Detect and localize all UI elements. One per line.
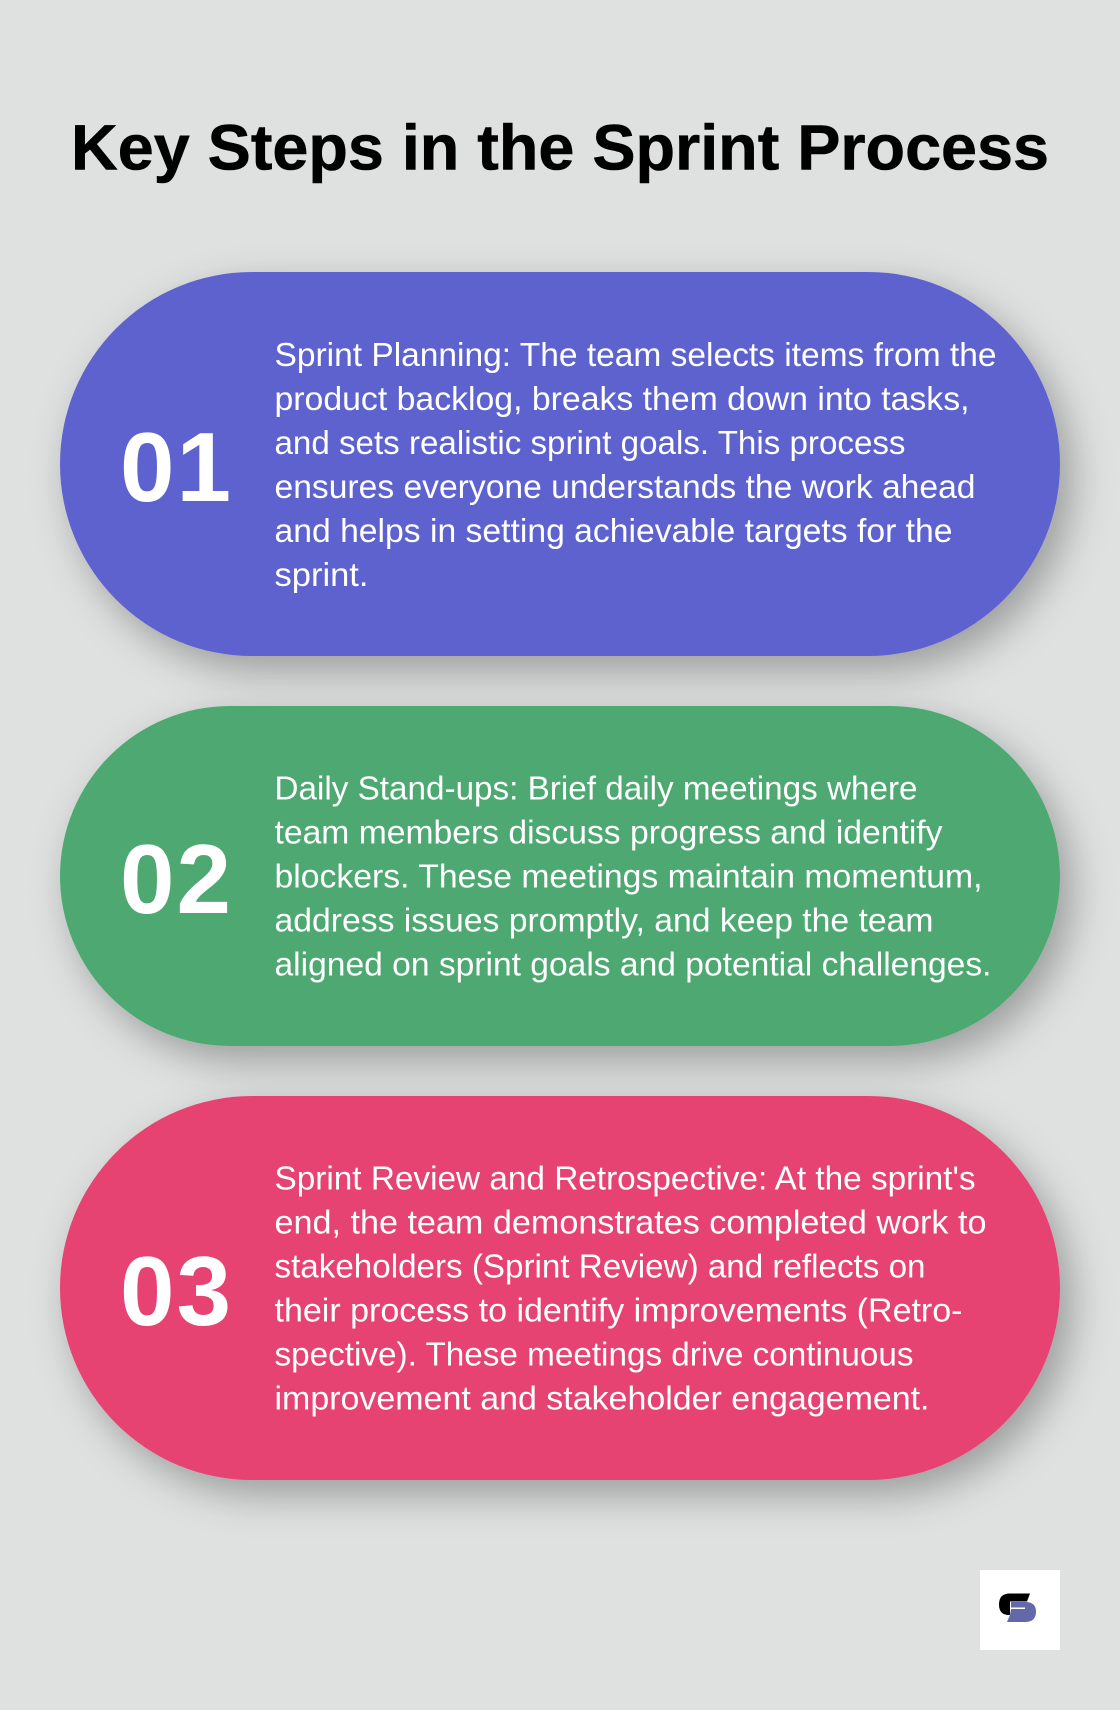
text block: step 01 description [274,336,996,593]
number: 02: 02 [120,824,233,934]
pill background: step 03 [60,1096,1060,1480]
text block: step 01 description: ensures everyone understands the work ahead [274,468,976,505]
panel: step 02 daily stand-ups [60,706,1060,1046]
text block: step 03 description: stakeholders (Sprint Review) and reflects on [274,1248,926,1284]
panel: step 03 sprint review and retrospective [60,1096,1060,1480]
text block: step 01 description: and helps in setting achievable targets for the [274,512,952,549]
panel: step 01 sprint planning [60,272,1060,656]
number: 03: 03 [120,1236,233,1346]
text block: step 01 description: Sprint Planning: The team selects items from the [274,336,996,373]
text block: step 01 description: and sets realistic sprint goals. This process [274,424,906,461]
text block: step 01 description: sprint. [274,556,368,593]
number: 01: 01 [120,412,233,522]
text block: step 02 description: blockers. These meetings maintain momentum, [274,858,983,894]
text block: step 03 description: Sprint Review and Retrospective: At the sprint's [274,1160,976,1196]
icon: logo badge [980,1570,1060,1650]
text block: step 03 description: improvement and stakeholder engagement. [274,1380,930,1416]
text block: step 03 description: end, the team demonstrates completed work to [274,1204,986,1240]
text block: step 03 description: spective). These meetings drive continuous [274,1336,914,1372]
text block: step 02 description: team members discuss progress and identify [274,814,943,850]
text block: step 02 description: address issues promptly, and keep the team [274,902,934,938]
text block: step 03 description: their process to identify improvements (Retro- [274,1292,962,1328]
text block: step 01 description: product backlog, breaks them down into tasks, [274,380,969,417]
text block: step 03 description [274,1160,986,1416]
title: Key Steps in the Sprint Process [71,112,1049,184]
text block: step 02 description: Daily Stand-ups: Brief daily meetings where [274,770,918,806]
text block: step 02 description: aligned on sprint goals and potential challenges. [274,946,991,982]
text block: step 02 description [274,770,991,982]
pill background: step 02 [60,706,1060,1046]
pill background: step 01 [60,272,1060,656]
